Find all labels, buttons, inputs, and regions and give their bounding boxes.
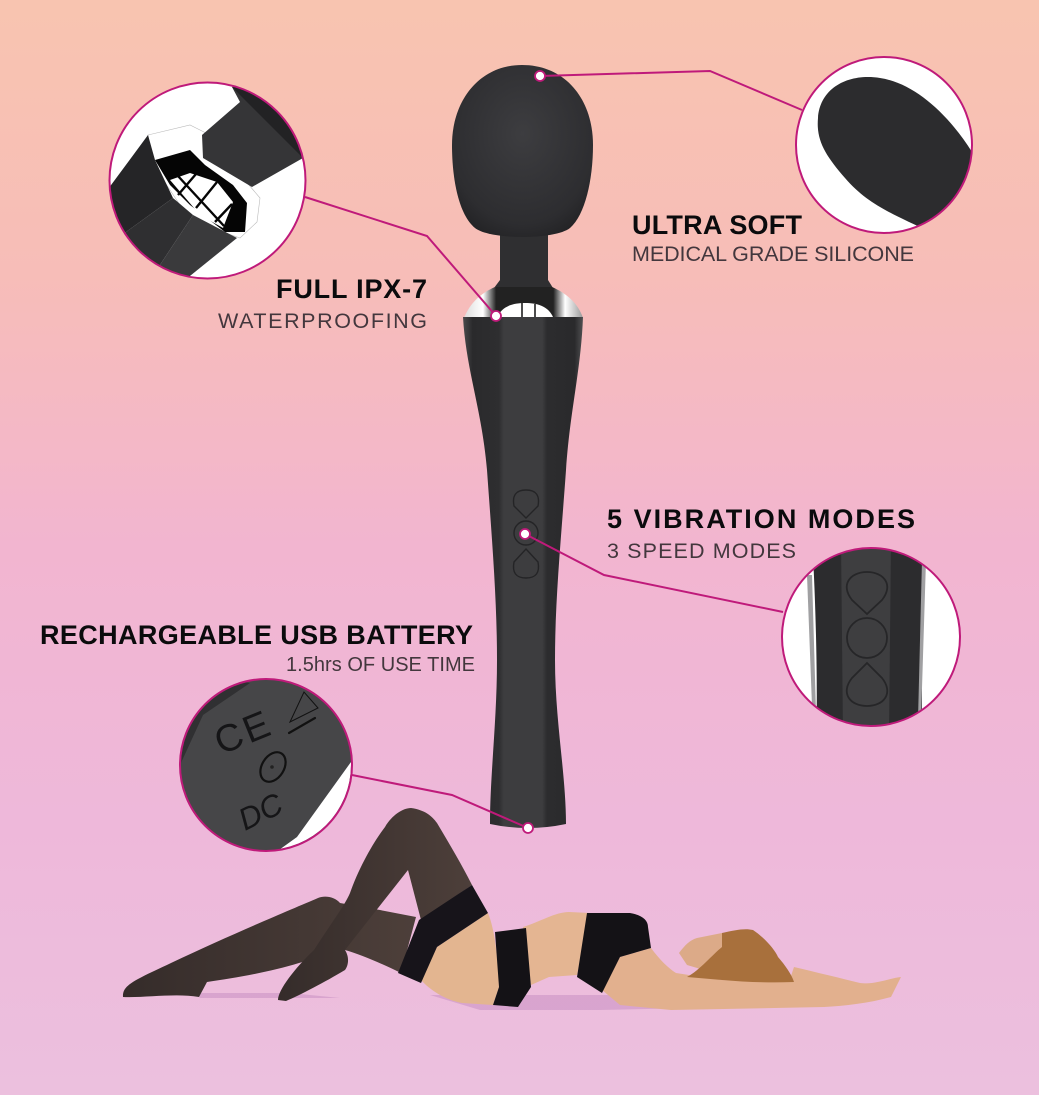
label: vibration modes: 5 VIBRATION MODES [607,504,915,534]
label: ultra soft: MEDICAL GRADE SILICONE [632,242,914,266]
detail circle: charging port [175,679,360,860]
callout line: ultra soft [540,71,802,110]
label: waterproofing: FULL IPX-7 [276,274,427,304]
label: ultra soft [632,210,914,266]
label: vibration modes: 3 SPEED MODES [607,539,796,563]
product chrome collar [464,287,583,318]
figure upper garment [577,913,651,993]
product neck [494,230,553,288]
figure near leg [278,808,472,1001]
detail circle: waterproof collar [108,82,306,280]
figure stocking band [398,885,488,983]
label: waterproofing [218,274,427,333]
product: massager wand [452,65,593,828]
figure far leg [123,897,416,997]
callout line: waterproofing [305,197,496,316]
product head [452,65,593,237]
figure floor shadow [195,993,830,1010]
reclining figure [123,808,901,1010]
label: waterproofing: WATERPROOFING [218,309,427,333]
detail circle: control buttons [782,540,960,735]
figure hair [687,929,794,982]
reflected window [170,173,233,228]
label: ultra soft: ULTRA SOFT [632,210,802,240]
detail circle: silicone head [796,57,985,233]
handle facets [110,135,173,232]
callout line: battery [352,775,528,828]
label: battery [40,620,475,676]
chrome ring [148,125,260,238]
port markings [255,692,318,786]
figure arm and shoulder [602,948,901,1010]
figure lower garment [493,928,531,1007]
label: vibration modes [607,504,915,563]
product buttons [514,490,538,578]
product handle [463,317,583,828]
CE mark: CE [209,702,279,763]
callout dots [491,71,545,833]
black recess [155,150,247,232]
label: battery: RECHARGEABLE USB BATTERY [40,620,473,650]
label: battery: 1.5hrs OF USE TIME [286,654,475,676]
figure torso [523,912,590,985]
callout line: vibration modes [525,534,783,612]
figure face [679,933,722,970]
DC mark: DC [233,786,289,837]
neck [202,86,302,187]
figure hip and thigh [421,913,499,1005]
